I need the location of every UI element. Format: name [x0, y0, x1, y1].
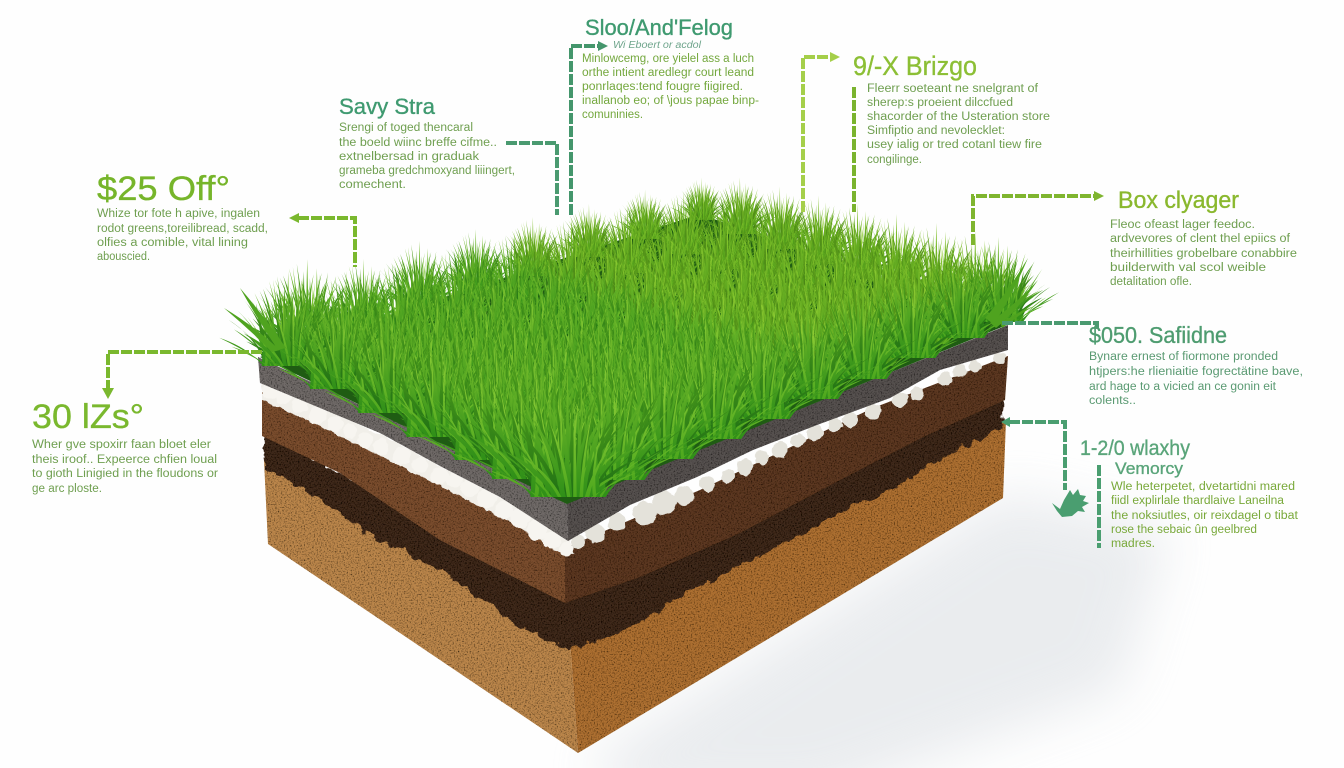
body text: sherep:s proeient dilccfued [867, 97, 1013, 109]
body text: olfies a comible, vital lining [97, 237, 248, 249]
body text [1089, 351, 1303, 407]
body text: congilinge. [867, 154, 922, 166]
arrow connector [1001, 417, 1065, 490]
body text: Wle heterpetet, dvetartidni mared [1111, 481, 1295, 493]
body text: extnelbersad in graduak [339, 151, 479, 163]
callout: Sloo/And'Felog [571, 15, 759, 215]
body text: orthe intient aredlegr court leand [582, 67, 754, 79]
body text: Bynare ernest of fiormone pronded [1089, 351, 1278, 363]
arrow connector [973, 191, 1104, 245]
body text: rose the sebaic ûn geelbred [1111, 524, 1257, 536]
body text: ponrlaqes:tend fougre fiigired. [582, 81, 743, 93]
heading: Savy Stra [339, 94, 436, 119]
body text: htjpers:he rlieniaitie fogrectätine bave, [1089, 366, 1303, 378]
arrow connector [102, 352, 262, 399]
callout: Box clyager [973, 187, 1297, 288]
body text: the noksiutles, oir reixdagel o tibat [1111, 510, 1299, 522]
body text: Whize tor fote h apive, ingalen [97, 208, 260, 220]
body text: comechent. [339, 179, 406, 191]
layer: brown soil [262, 356, 1008, 603]
body text [97, 208, 268, 263]
body text: abouscied. [97, 251, 150, 263]
icon: green splash [1052, 489, 1089, 517]
body text: theis iroof.. Expeerce chfien loual [32, 454, 217, 466]
body text: to gioth Linigied in the floudons or [32, 468, 218, 480]
body text: Srengi of toged thencaral [339, 122, 473, 134]
body text: comuninies. [582, 109, 643, 121]
arrow connector [571, 41, 608, 215]
grass [219, 177, 1059, 504]
sub heading: Vemorcy [1115, 459, 1184, 478]
body text [1110, 219, 1297, 288]
heading: 1-2/0 wlaxhy [1080, 437, 1190, 460]
callout: 1-2/0 wlaxhy Vemorcy [1001, 417, 1299, 550]
callout: 30 lZs [32, 352, 262, 495]
grass tufts along rim [219, 237, 1059, 497]
body text: rodot greens,toreilibread, scadd, [97, 223, 268, 235]
soil block cross-section [258, 325, 1008, 753]
body text: ge arc ploste. [32, 483, 102, 495]
body text: Minlowcemg, ore yielel ass a luch [582, 53, 754, 65]
layer: white gravel [262, 352, 1006, 556]
callout: $050. Safiidne [1002, 322, 1303, 407]
body text: detalitation ofle. [1110, 276, 1192, 288]
arrow connector [506, 143, 557, 215]
body text: fiidl explirlale thardlaive Laneilna [1111, 495, 1285, 507]
layer: sand [264, 420, 1006, 753]
divider bar [852, 87, 856, 212]
callout: $25 Off [97, 170, 355, 267]
body text: ardvevores of clent thel epiics of [1110, 233, 1291, 245]
body text: Simfiptio and nevolecklet: [867, 125, 1005, 137]
body text [582, 53, 759, 121]
body text: grameba gredchmoxyand liiingert, [339, 165, 515, 177]
body text: inallanob eo; of \jous papae binp- [582, 95, 759, 107]
body text: shacorder of the Usteration store [867, 111, 1050, 123]
grass floor [260, 214, 1007, 504]
divider bar [1097, 465, 1101, 548]
callout: 9/-X Brizgo [803, 51, 1050, 212]
heading: $25 Off° [97, 170, 230, 208]
heading: $050. Safiidne [1089, 322, 1227, 348]
body text: builderwith val scol weible [1110, 262, 1266, 274]
grass wisps at corners [224, 258, 1038, 352]
body text: the boeld wiinc breffe cifme.. [339, 137, 497, 149]
body text: Wher gve spoxirr faan bloet eler [32, 439, 211, 451]
heading: 9/-X Brizgo [853, 51, 977, 81]
callout: Savy Stra [339, 94, 557, 215]
body text: colents.. [1089, 395, 1136, 407]
body text: theirhillities grobelbare conabbire [1110, 248, 1297, 260]
body text [1111, 481, 1299, 550]
heading: Box clyager [1118, 187, 1239, 214]
grass tufts back half [490, 177, 1040, 389]
sub heading: Wi Eboert or acdol [613, 40, 702, 51]
layer: grey rim [258, 325, 1008, 541]
body text [32, 439, 218, 495]
heading: Sloo/And'Felog [585, 15, 733, 40]
body text: Fleerr soeteant ne snelgrant of [867, 83, 1039, 95]
arrow connector [803, 52, 840, 212]
heading: 30 lZs° [32, 398, 144, 436]
body text: madres. [1111, 538, 1155, 550]
body text: ard hage to a vicied an ce gonin eit [1089, 381, 1277, 393]
background shadow [590, 495, 1170, 768]
arrow connector [289, 213, 355, 267]
body text [867, 83, 1050, 166]
body text [339, 122, 515, 191]
layer: dark soil [262, 395, 1005, 648]
grass tufts front half [241, 229, 832, 458]
body text: Fleoc ofeast lager feedoc. [1110, 219, 1255, 231]
arrow connector [1002, 323, 1097, 328]
body text: usey ialig or tred cotanl tiew fire [867, 139, 1042, 151]
